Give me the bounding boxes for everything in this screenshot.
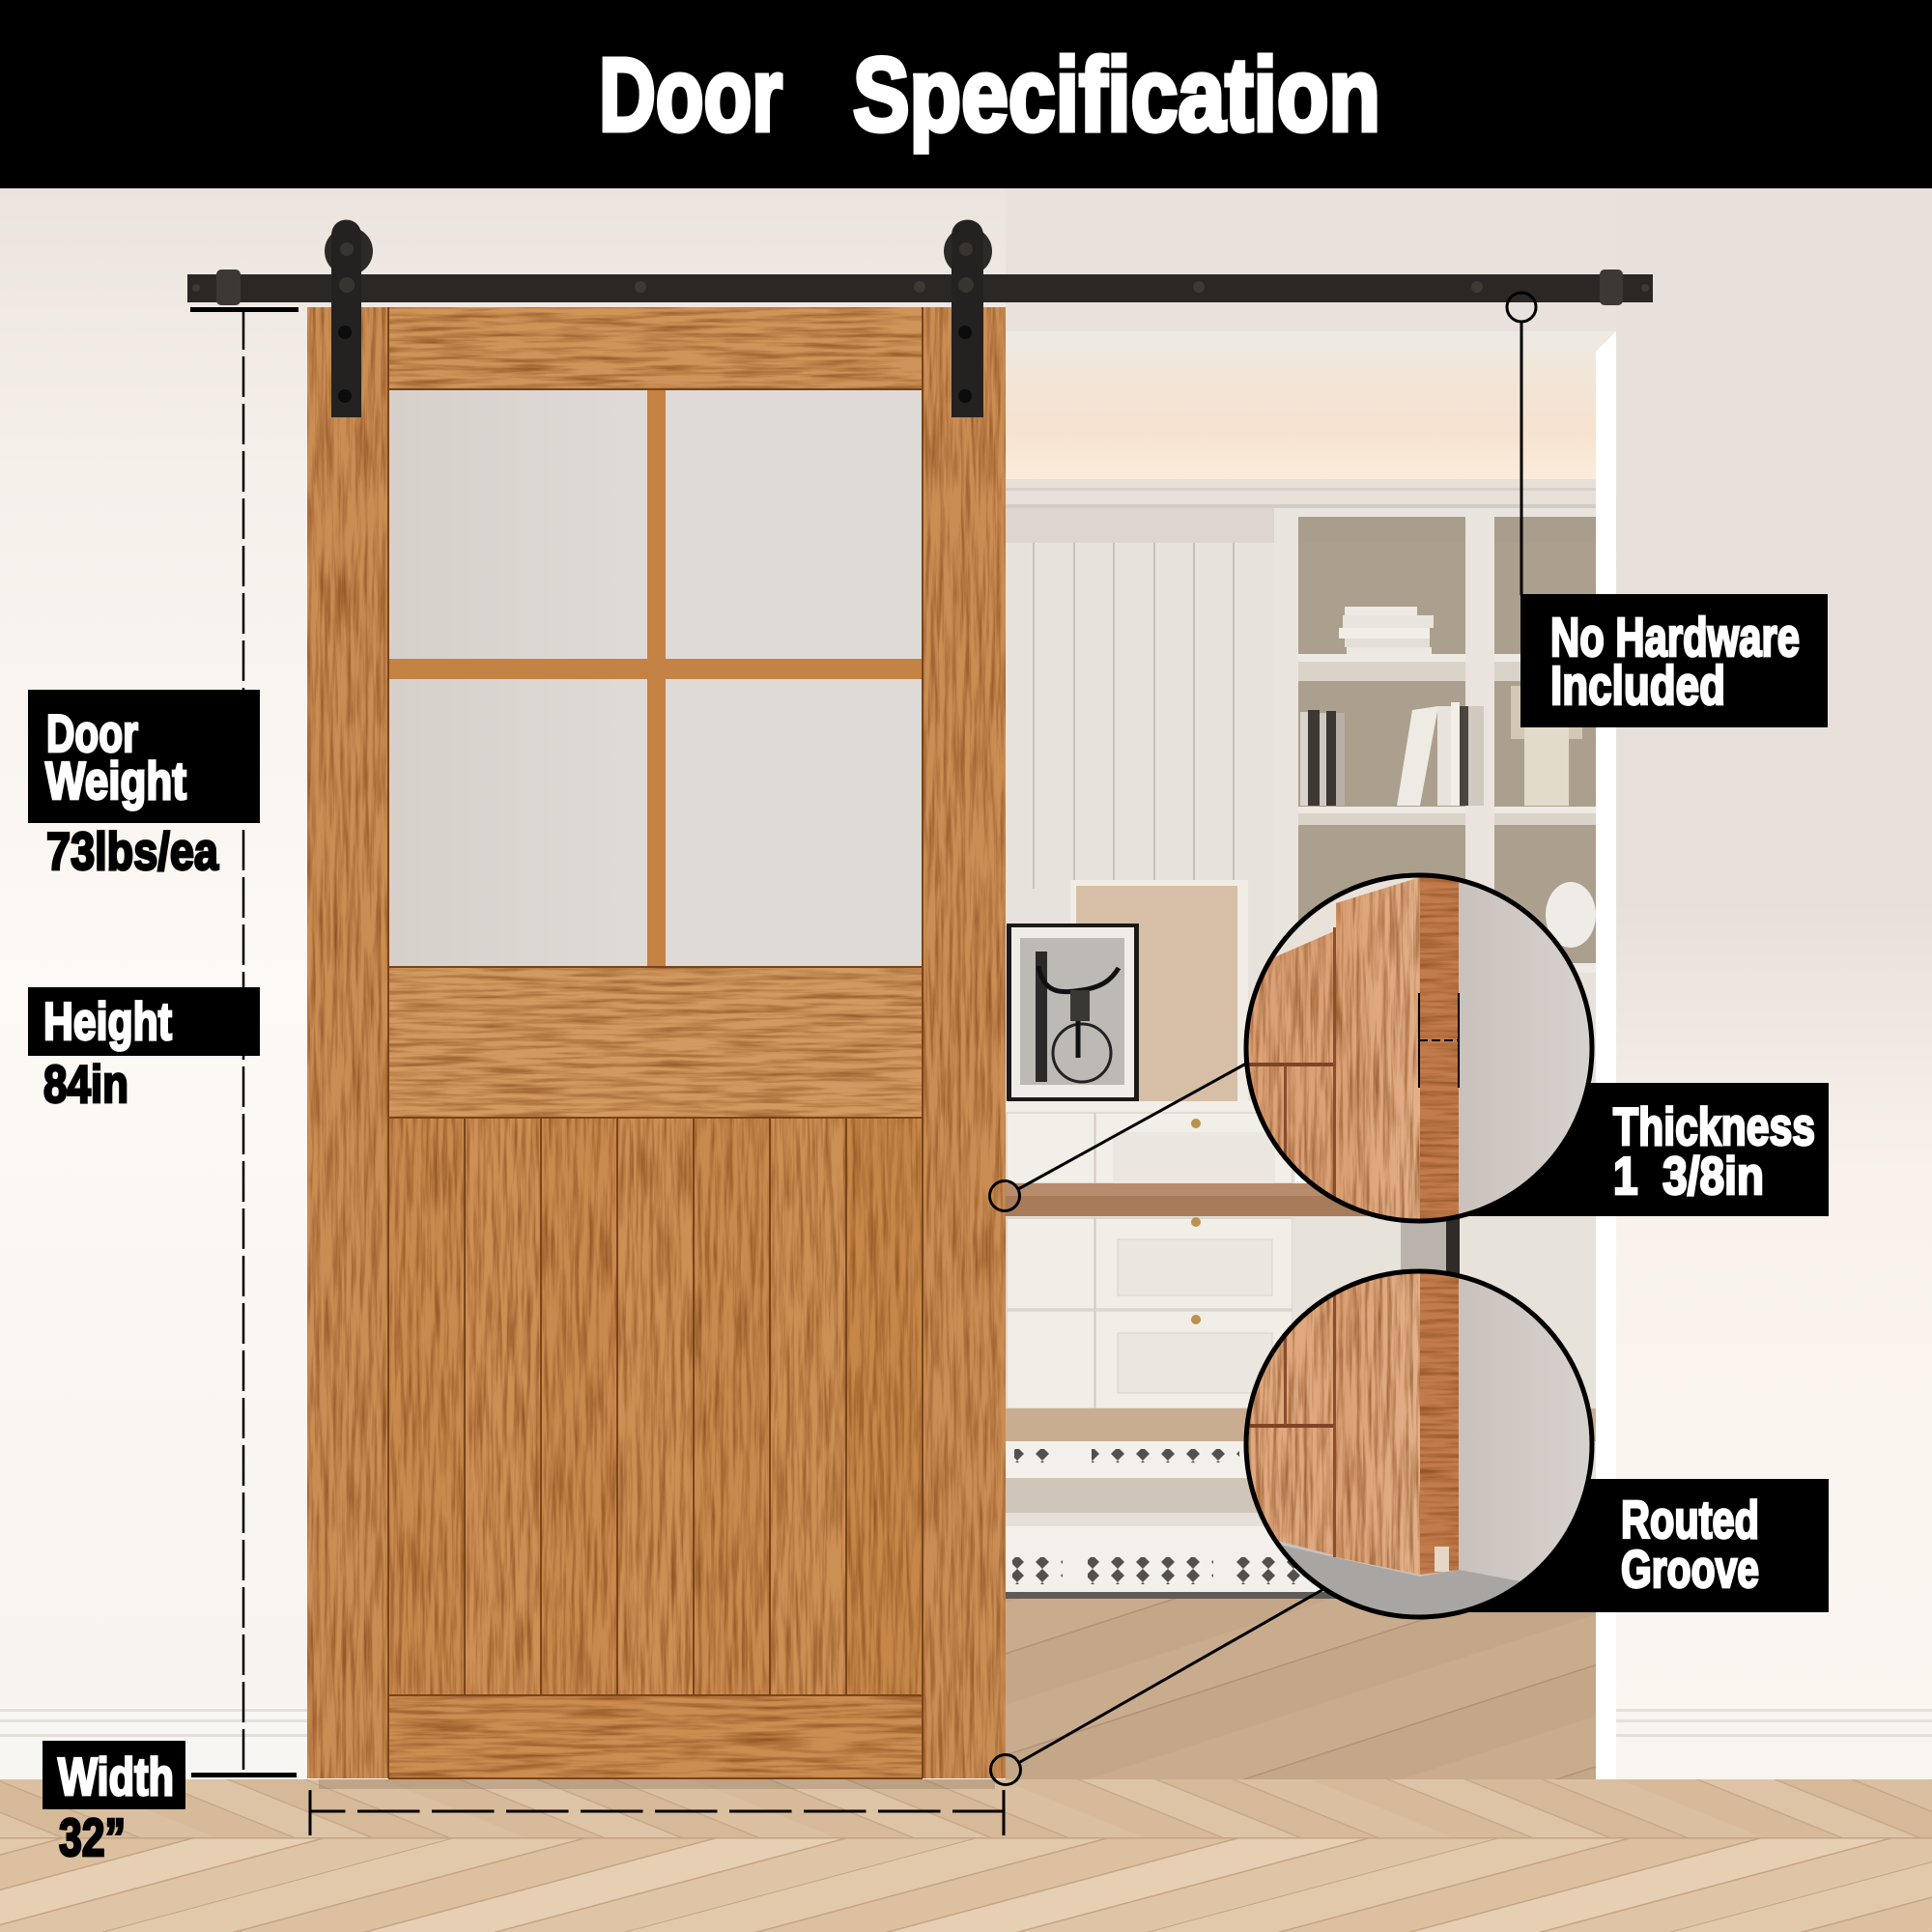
ceiling bbox=[1006, 352, 1596, 479]
sculpture bbox=[1511, 686, 1582, 806]
width value: 32” bbox=[59, 1807, 126, 1867]
track rail bbox=[187, 274, 1653, 302]
rail stops bbox=[216, 270, 1623, 305]
detail circle: bottom groove bbox=[1241, 1265, 1599, 1623]
right strap and wheel bbox=[944, 220, 992, 417]
soffit bbox=[1006, 331, 1616, 352]
height value: 84in bbox=[43, 1054, 128, 1114]
label box bbox=[1459, 1083, 1829, 1216]
thickness text bbox=[1613, 1096, 1815, 1206]
label: width: Width bbox=[58, 1747, 174, 1806]
right cabinet column bbox=[1293, 1216, 1596, 1506]
bookshelf bbox=[1274, 508, 1596, 1126]
door frame stiles bbox=[307, 307, 1006, 1778]
far floor bbox=[1006, 1408, 1596, 1441]
vase bbox=[1546, 882, 1596, 948]
header band bbox=[0, 0, 1932, 188]
rug bbox=[1006, 1441, 1363, 1599]
label box bbox=[1459, 1479, 1829, 1612]
callout: no hardware included bbox=[1507, 293, 1828, 727]
thickness text: Thickness bbox=[1613, 1096, 1815, 1156]
callout: no hardware included: Included bbox=[1550, 655, 1725, 717]
pointer bbox=[989, 1064, 1246, 1211]
crown moulding bbox=[1006, 479, 1596, 508]
lower cabinets bbox=[1006, 1216, 1295, 1416]
label: door weight: Door bbox=[46, 703, 138, 763]
sliding track hardware bbox=[187, 220, 1653, 417]
main floor bbox=[0, 1779, 1932, 1932]
books bbox=[1300, 607, 1484, 806]
callout: no hardware included: No Hardware bbox=[1550, 607, 1800, 668]
door weight value: 73lbs/ea bbox=[46, 821, 218, 881]
lower planks bbox=[388, 1118, 923, 1695]
bottom rail bbox=[388, 1695, 923, 1778]
rail bolts bbox=[192, 281, 1649, 293]
panelled wall bbox=[1006, 508, 1274, 1126]
height dimension line bbox=[190, 307, 298, 1777]
framed art bbox=[1070, 880, 1248, 1101]
glass panes bbox=[388, 389, 923, 967]
detail circle: door edge bbox=[1241, 869, 1604, 1230]
callout: thickness bbox=[989, 869, 1829, 1230]
doorway interior room bbox=[1006, 331, 1616, 1779]
wood shelf bbox=[1006, 1183, 1392, 1216]
title bbox=[599, 36, 1380, 153]
label: height bbox=[28, 987, 260, 1056]
pointer bbox=[991, 1588, 1325, 1785]
middle rail bbox=[388, 967, 923, 1118]
title: Specification bbox=[853, 36, 1380, 153]
upper cabinets bbox=[1006, 1113, 1295, 1183]
callout: routed groove bbox=[991, 1265, 1829, 1785]
top rail bbox=[388, 307, 923, 389]
left strap and wheel bbox=[325, 220, 373, 417]
width dimension line bbox=[310, 1790, 1004, 1835]
title: Door bbox=[599, 36, 782, 153]
barn door bbox=[307, 307, 1006, 1778]
panel seams bbox=[388, 307, 923, 1778]
inner floor bbox=[1006, 1599, 1596, 1779]
right reveal bbox=[1596, 331, 1616, 1778]
label: door weight: Weight bbox=[45, 751, 186, 810]
routed groove text: Groove bbox=[1621, 1539, 1759, 1599]
label: width bbox=[43, 1741, 185, 1809]
thickness text: 1 3/8in bbox=[1613, 1146, 1764, 1206]
label: door weight bbox=[28, 690, 260, 823]
thickness marks bbox=[1419, 993, 1459, 1088]
label: height: Height bbox=[43, 991, 172, 1051]
counter bbox=[1006, 1101, 1353, 1113]
framed bicycle photo bbox=[1007, 923, 1139, 1101]
baseboards bbox=[0, 1708, 1932, 1779]
routed groove text bbox=[1621, 1490, 1759, 1599]
routed groove text: Routed bbox=[1621, 1490, 1759, 1549]
